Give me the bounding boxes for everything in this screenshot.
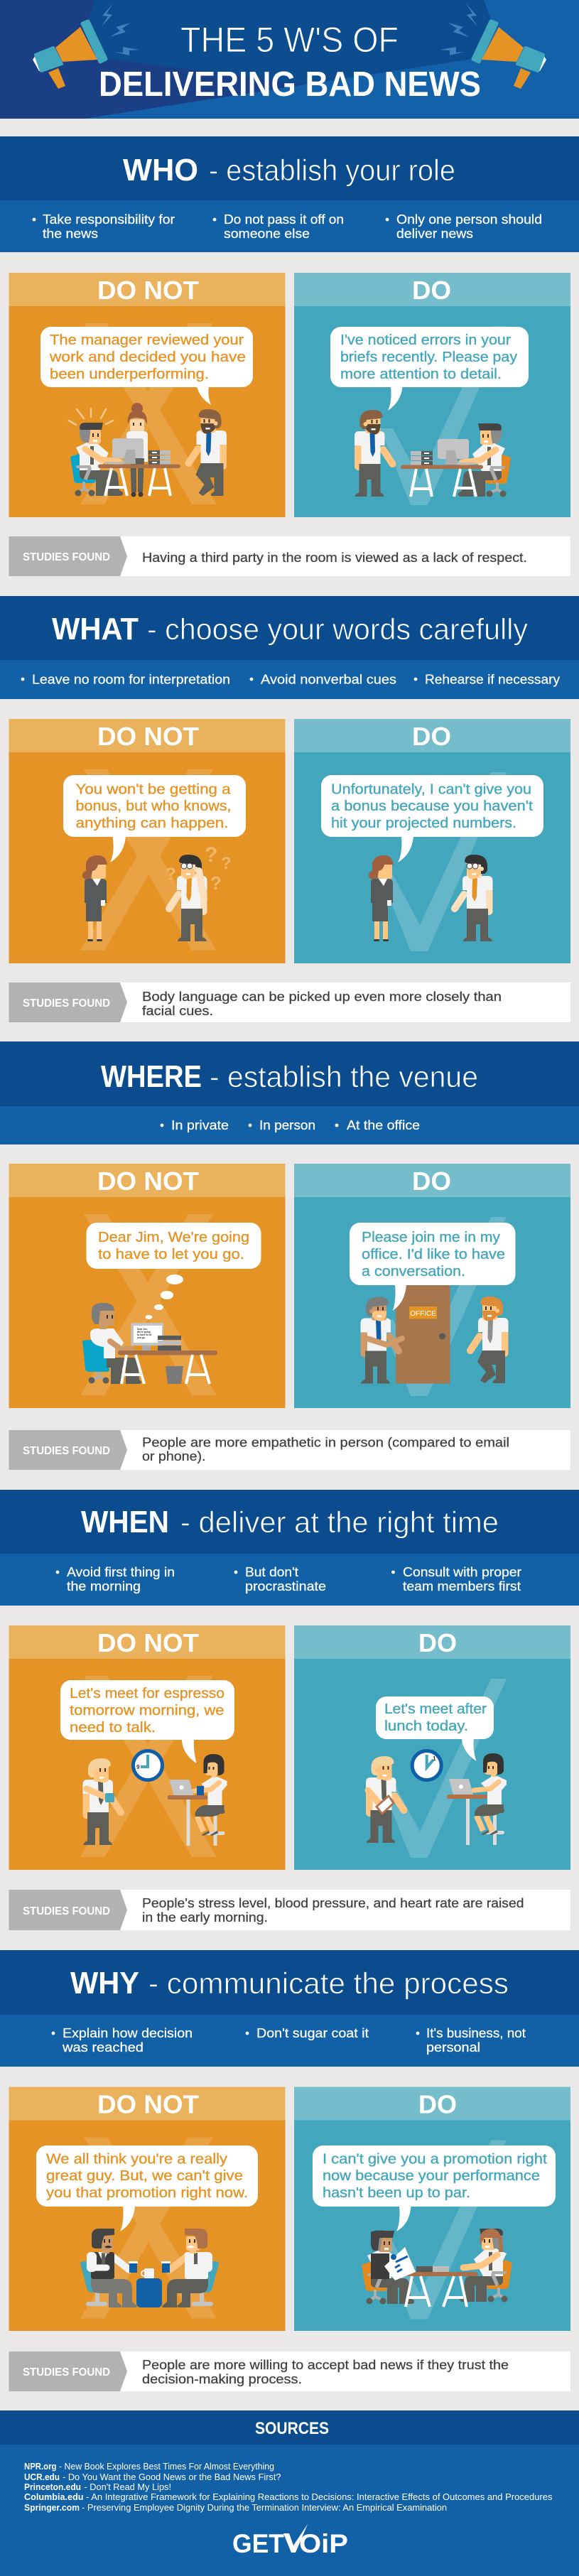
panel: do not (when): DO NOT — [97, 1628, 199, 1657]
bullet band: what: Avoid nonverbal cues — [261, 672, 396, 686]
bullet band: where: In person — [259, 1117, 315, 1132]
heading band: who: WHO — [123, 153, 198, 188]
bullet band: why: It's business, not — [426, 2025, 526, 2040]
heading band: why: WHY — [70, 1966, 139, 2001]
illustration: manager and employee at desk — [355, 410, 511, 497]
heading band: who: - establish your role — [209, 153, 455, 187]
panel: do not (when) — [9, 1625, 286, 1870]
speech bubble — [321, 775, 543, 862]
panel: do (who) — [294, 273, 570, 517]
bullet band: who: Only one person should — [396, 212, 542, 227]
source list: Springer.com — [24, 2502, 80, 2513]
bullet band: what — [0, 660, 579, 699]
bullet band: who: someone else — [224, 226, 310, 241]
speech bubble — [60, 1680, 234, 1763]
panel: do (when): DO — [418, 1628, 457, 1657]
source list — [24, 2461, 553, 2513]
illustration: man writing email at desk: you go. — [137, 1336, 146, 1339]
speech bubble — [313, 2145, 556, 2231]
speech bubble with thought dots: to have to let you go. — [98, 1247, 244, 1262]
speech bubble: I've noticed errors in your — [340, 332, 511, 348]
illustration: woman speaks to confused man: ? — [166, 865, 176, 884]
icon: left megaphone — [33, 4, 139, 89]
studies found callout: when: in the early morning. — [142, 1910, 268, 1925]
illustration: woman speaks to confused man — [82, 843, 232, 941]
illustration: woman explains to man — [369, 855, 493, 941]
panel: do (what): DO — [412, 722, 451, 751]
heading band: why: - communicate the process — [148, 1966, 509, 2000]
panel: do (what) — [294, 719, 570, 963]
panel: do not (where): DO NOT — [97, 1167, 199, 1196]
bullet band: who — [0, 200, 579, 252]
bullet band: why — [0, 2015, 579, 2067]
studies found callout: when: People's stress level, blood pressure, and heart rate are raised — [142, 1896, 524, 1910]
illustration: stressed worker with third party — [69, 403, 227, 497]
illustration: man writing email at desk: to have to let — [137, 1333, 152, 1336]
speech bubble — [36, 2145, 258, 2231]
speech bubble: Please join me in my — [362, 1230, 500, 1245]
studies found callout: where: or phone). — [142, 1449, 206, 1463]
studies found callout: what: STUDIES FOUND — [23, 997, 110, 1010]
source list: - Don't Read My Lips! — [84, 2482, 171, 2492]
section: where — [0, 1041, 579, 1470]
heading band: why — [0, 1950, 579, 2015]
illustration: office door invitation — [361, 1279, 509, 1384]
panel: do (when) — [294, 1625, 570, 1870]
speech bubble: a bonus because you haven't — [331, 799, 533, 814]
panel: do not (where) — [9, 1164, 286, 1408]
section: what — [0, 596, 579, 1022]
speech bubble — [376, 1696, 494, 1761]
section: who — [0, 136, 579, 576]
source list: Columbia.edu — [24, 2491, 84, 2502]
bullet band: what: Leave no room for interpretation — [32, 672, 230, 686]
speech bubble: The manager reviewed your — [50, 332, 244, 348]
speech bubble: great guy. But, we can't give — [46, 2168, 243, 2184]
illustration: early morning meeting — [82, 1750, 227, 1846]
speech bubble: briefs recently. Please pay — [340, 350, 517, 365]
speech bubble: Let's meet for espresso — [70, 1686, 224, 1701]
speech bubble: anything can happen. — [75, 816, 229, 831]
bullet band: when: procrastinate — [245, 1579, 326, 1593]
speech bubble: hasn't been up to par. — [323, 2185, 470, 2201]
studies found callout: who: STUDIES FOUND — [23, 551, 110, 563]
studies found callout: when — [9, 1890, 570, 1930]
panel: do not (why) — [9, 2087, 286, 2331]
panel: do (where) — [294, 1164, 570, 1408]
speech bubble: need to talk. — [70, 1720, 156, 1736]
bullet band: where: At the office — [347, 1117, 420, 1132]
heading band: what: WHAT — [52, 612, 139, 646]
bullet band: why: Explain how decision — [63, 2025, 193, 2040]
bullet band: when — [0, 1554, 579, 1606]
speech bubble — [350, 1223, 516, 1311]
speech bubble: lunch today. — [384, 1719, 468, 1734]
illustration: office door invitation: OFFICE — [410, 1310, 436, 1318]
panel: do not (who): DO NOT — [97, 276, 199, 305]
studies found callout: what — [9, 983, 570, 1022]
illustration: man writing email at desk — [82, 1303, 217, 1384]
heading band: where: WHERE — [101, 1059, 202, 1094]
bullet band: who: Take responsibility for — [43, 212, 175, 227]
heading band: where — [0, 1041, 579, 1106]
panel: do (why): DO — [418, 2090, 457, 2118]
heading band: when: - deliver at the right time — [180, 1505, 499, 1539]
studies found callout: where: People are more empathetic in person (compared to email — [142, 1435, 509, 1449]
panel: do (why) — [294, 2087, 570, 2331]
bullet band: where — [0, 1106, 579, 1144]
header — [0, 0, 579, 119]
bullet band: who: the news — [43, 226, 98, 241]
source list: UCR.edu — [24, 2472, 60, 2482]
studies found callout: what: Body language can be picked up even more closely than — [142, 990, 502, 1004]
bullet band: when: But don't — [245, 1564, 298, 1579]
panel: do (who): DO — [412, 276, 451, 305]
speech bubble: You won't be getting a — [75, 781, 231, 797]
bullet band: why: Don't sugar coat it — [256, 2025, 369, 2040]
bullet band: when: team members first — [403, 1579, 521, 1593]
studies found callout: where — [9, 1430, 570, 1470]
logo: GetVoIP: OiP — [299, 2529, 348, 2558]
title line one: THE 5 W'S OF — [180, 20, 399, 60]
studies found callout: why: People are more willing to accept bad news if they trust the — [142, 2358, 509, 2372]
speech bubble: a conversation. — [362, 1264, 465, 1279]
icon: right megaphone — [440, 4, 546, 89]
illustration: meeting after lunch — [366, 1750, 507, 1845]
logo: GetVoIP — [232, 2524, 348, 2558]
source list: - New Book Explores Best Times For Almost Everything — [59, 2461, 274, 2472]
illustration: man writing email at desk: Dear Jim, — [137, 1328, 148, 1331]
speech bubble: work and decided you have — [49, 350, 246, 365]
heading band: who — [0, 136, 579, 200]
speech bubble: been underperforming. — [50, 367, 209, 382]
studies found callout: who: Having a third party in the room is viewed as a lack of respect. — [142, 551, 527, 565]
bullet band: why: personal — [426, 2040, 480, 2055]
illustration: woman speaks to confused man: ? — [210, 872, 222, 894]
bullet band: who: Do not pass it off on — [224, 212, 344, 227]
bullet band: what: Rehearse if necessary — [425, 672, 561, 686]
source list: NPR.org — [24, 2461, 57, 2472]
studies found callout: why: decision-making process. — [142, 2372, 302, 2386]
speech bubble: We all think you're a really — [46, 2151, 227, 2167]
bullet band: where: In private — [171, 1117, 229, 1132]
speech bubble: you that promotion right now. — [46, 2185, 248, 2201]
speech bubble: more attention to detail. — [340, 367, 502, 382]
bullet band: when: Consult with proper — [403, 1564, 521, 1579]
studies found callout: when: STUDIES FOUND — [23, 1905, 110, 1917]
bullet band: when: Avoid first thing in — [67, 1564, 175, 1579]
heading band: when — [0, 1490, 579, 1554]
speech bubble — [330, 327, 529, 411]
illustration: manager reviews report with employee — [362, 2229, 512, 2307]
section: why — [0, 1950, 579, 2391]
illustration: early morning meeting: 9 — [136, 1764, 140, 1770]
illustration: woman speaks to confused man: ? — [205, 843, 217, 867]
speech bubble: I can't give you a promotion right — [323, 2151, 547, 2167]
panel: do (where): DO — [412, 1167, 451, 1196]
studies found callout: why — [9, 2352, 570, 2391]
source list: Princeton.edu — [24, 2482, 81, 2492]
heading band: what: - choose your words carefully — [147, 612, 528, 646]
section: when — [0, 1490, 579, 1930]
speech bubble with thought dots: Dear Jim, We're going — [98, 1230, 249, 1245]
studies found callout: what: facial cues. — [142, 1004, 213, 1018]
speech bubble: hit your projected numbers. — [331, 816, 516, 831]
sources footer — [0, 2410, 579, 2576]
bullet band: why: was reached — [62, 2040, 144, 2055]
speech bubble: Let's meet after — [384, 1701, 487, 1717]
studies found callout: why: STUDIES FOUND — [23, 2366, 110, 2379]
illustration: man writing email at desk: We're going — [137, 1331, 151, 1333]
illustration: casual coffee chat — [80, 2229, 219, 2307]
sources heading: SOURCES — [255, 2419, 329, 2438]
speech bubble: Unfortunately, I can't give you — [331, 781, 531, 797]
speech bubble: tomorrow morning, we — [70, 1703, 224, 1719]
heading band: where: - establish the venue — [210, 1060, 478, 1093]
speech bubble with thought dots — [87, 1223, 261, 1319]
bullet band: when: the morning — [67, 1579, 141, 1593]
panel: do not (what) — [9, 719, 286, 963]
studies found callout: who — [9, 536, 570, 576]
illustration: meeting after lunch: 1 — [433, 1755, 436, 1762]
panel: do not (what): DO NOT — [97, 722, 199, 751]
speech bubble — [40, 327, 253, 405]
logo: GetVoIP: GET — [232, 2529, 284, 2558]
speech bubble — [63, 775, 246, 862]
heading band: what — [0, 596, 579, 660]
studies found callout: where: STUDIES FOUND — [23, 1445, 110, 1457]
heading band: when: WHEN — [81, 1505, 169, 1539]
illustration: woman speaks to confused man: ? — [221, 854, 232, 873]
title line two: DELIVERING BAD NEWS — [99, 65, 481, 104]
panel: do not (why): DO NOT — [97, 2090, 199, 2118]
bullet band: who: deliver news — [396, 226, 473, 241]
source list: - An Integrative Framework for Explaining Reactions to Decisions: Interactive Effects of Outcomes and Procedures — [86, 2491, 553, 2502]
source list: - Do You Want the Good News or the Bad News First? — [63, 2472, 281, 2482]
speech bubble: office. I'd like to have — [362, 1247, 505, 1262]
panel: do not (who) — [9, 273, 286, 517]
speech bubble: now because your performance — [323, 2168, 540, 2184]
speech bubble: bonus, but who knows, — [75, 799, 232, 814]
source list: - Preserving Employee Dignity During the Termination Interview: An Empirical Examination — [82, 2502, 447, 2513]
